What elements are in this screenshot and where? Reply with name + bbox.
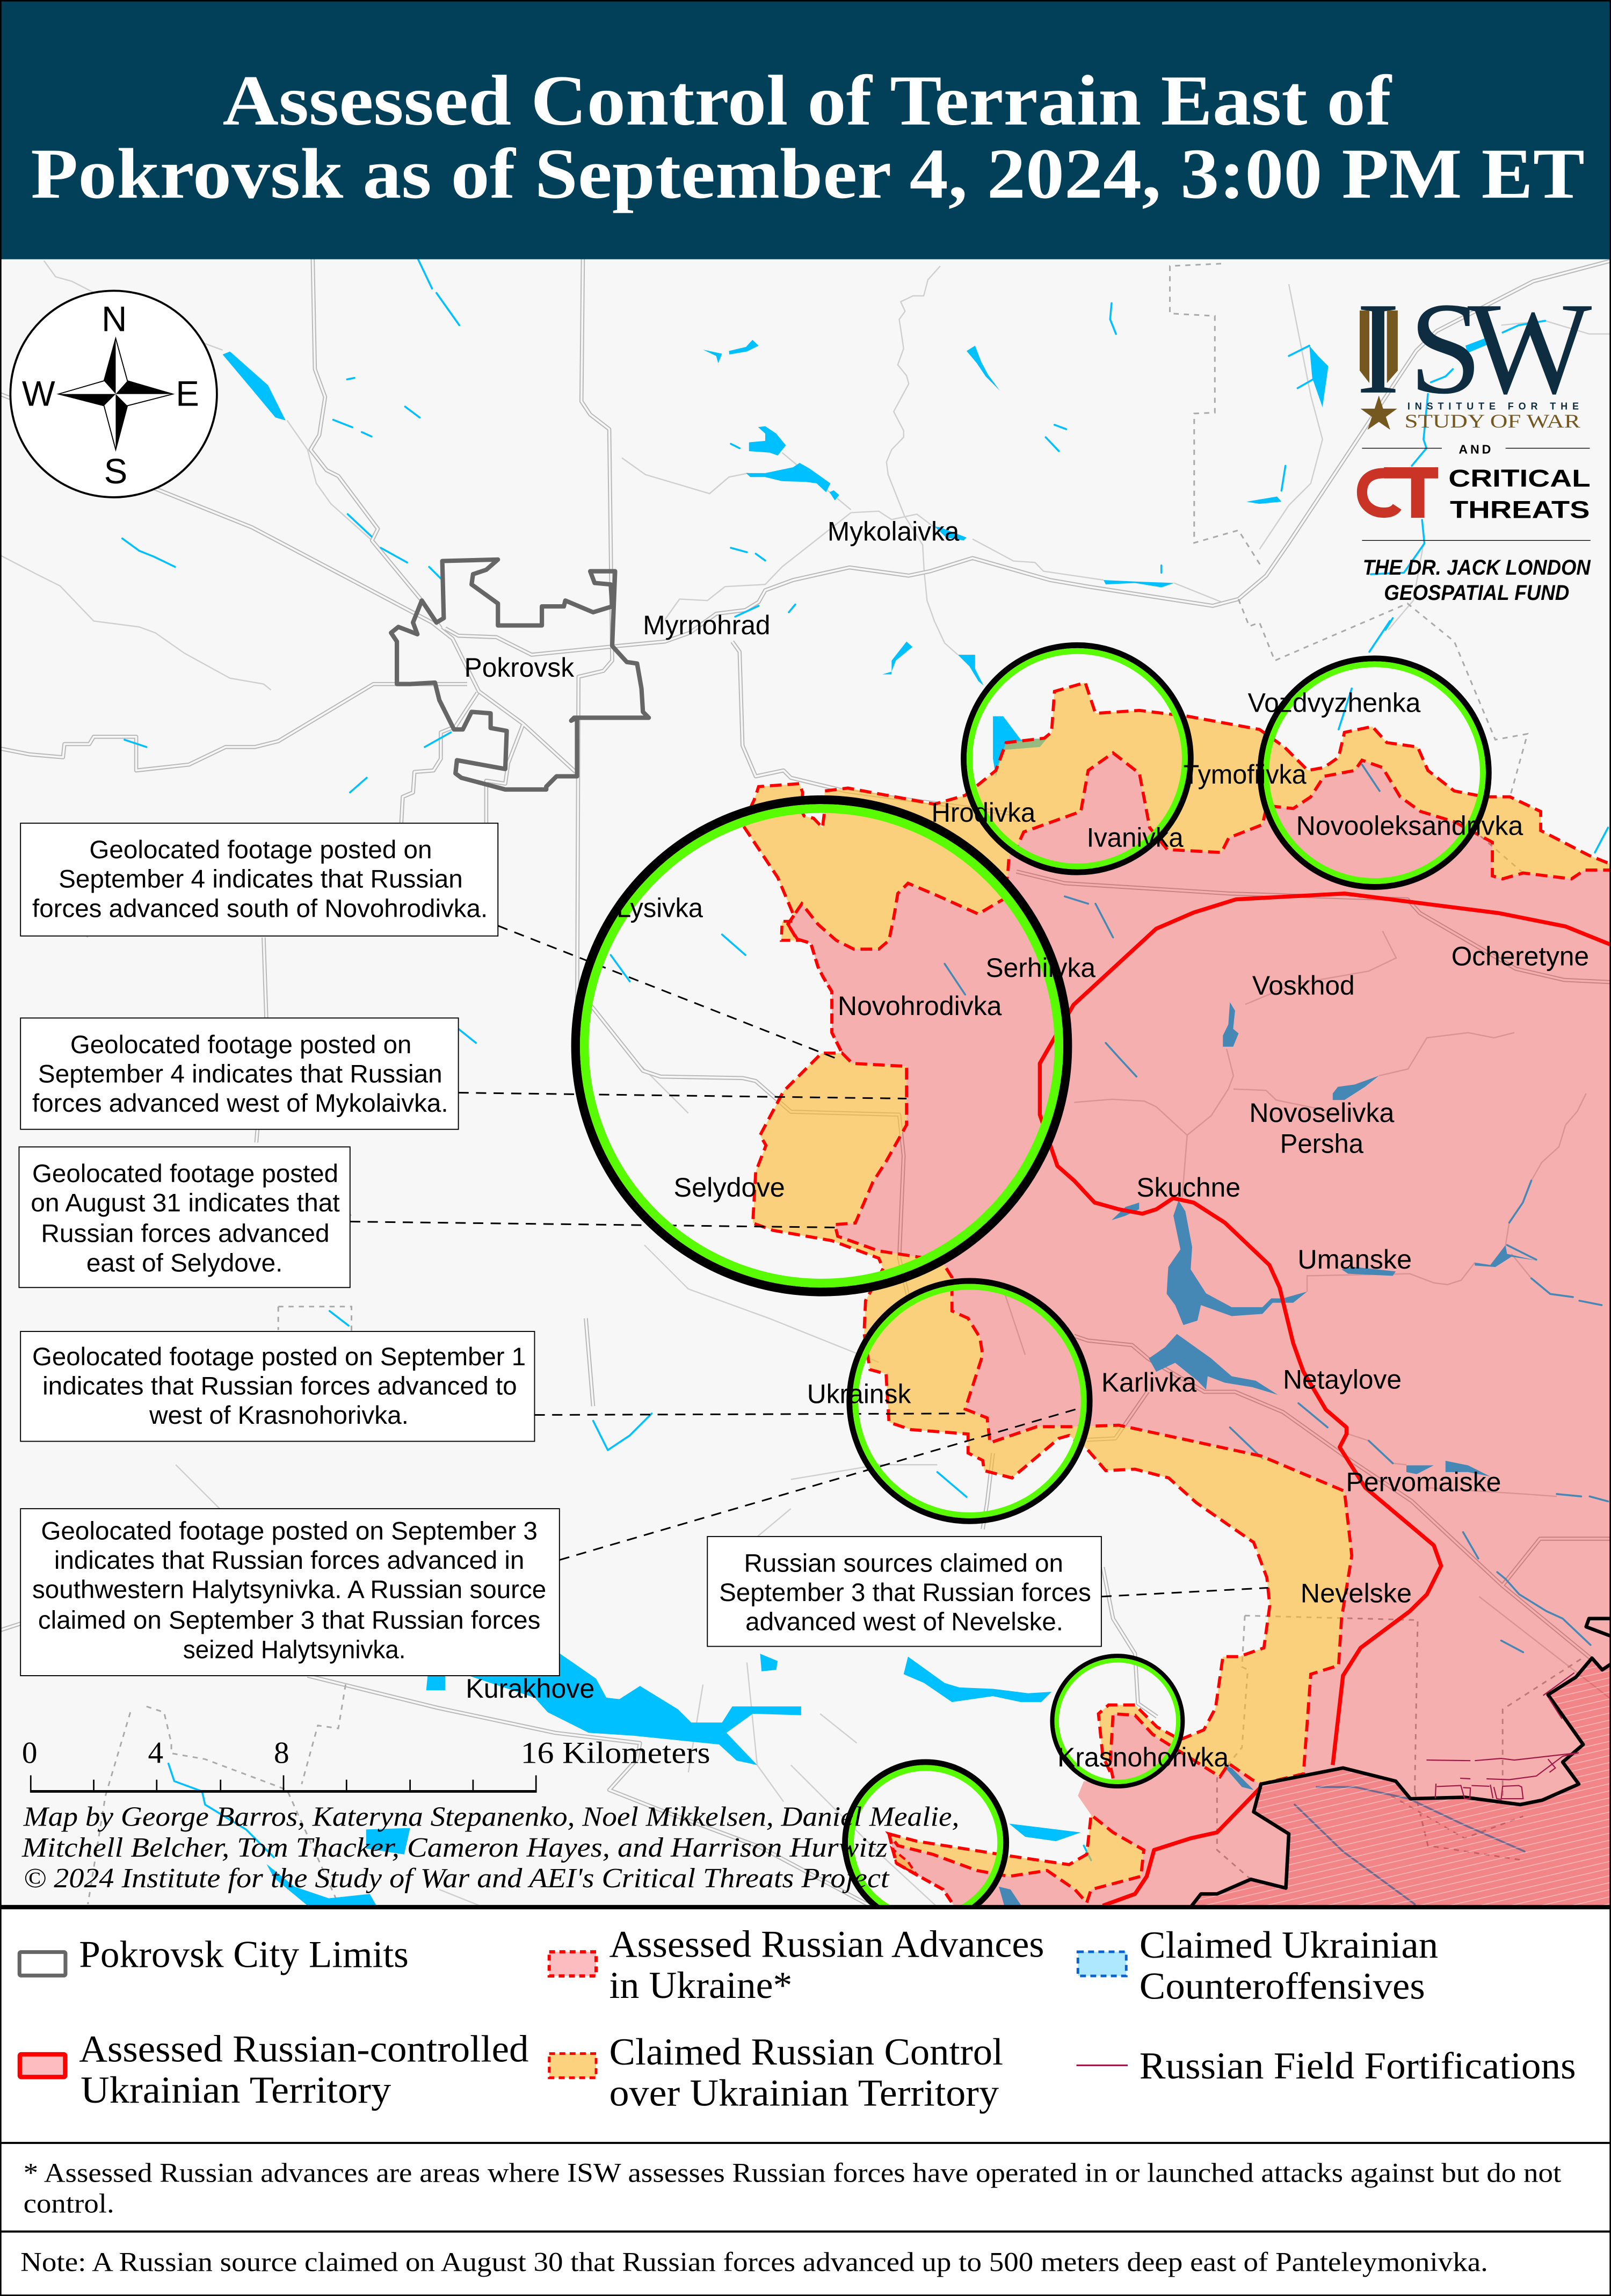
Jack London Geospatial Fund: GEOSPATIAL FUND — [1384, 581, 1569, 605]
map credits: Mitchell Belcher, Tom Thacker, Cameron Hayes, and Harrison Hurwitz — [21, 1833, 888, 1863]
title text: Assessed Control of Terrain East of — [223, 61, 1392, 140]
settlement labels: Hrodivka — [932, 798, 1036, 828]
roads — [0, 258, 1611, 1906]
callout: west of Mykolaivka: Geolocated footage posted on — [70, 1031, 411, 1059]
legend: claimed Ukrainian counteroffensives: Claimed Ukrainian — [1140, 1924, 1438, 1966]
claimed Russian control: small western piece — [781, 921, 798, 940]
map credits — [21, 1802, 959, 1894]
divider AND: AND — [1458, 442, 1491, 456]
Critical Threats logo: CRITICAL — [1448, 465, 1591, 492]
map base — [0, 259, 1611, 1909]
settlement labels: Ukrainsk — [807, 1379, 911, 1409]
scale bar: 4 — [148, 1736, 163, 1770]
claimed Russian control: southwest patch — [889, 1815, 1144, 1903]
settlement labels: Ocheretyne — [1452, 941, 1589, 971]
settlement labels: Kurakhove — [466, 1674, 594, 1704]
logos: ISW, Critical Threats, Jack London fund — [1356, 276, 1592, 605]
title banner — [0, 0, 1611, 259]
title text — [31, 61, 1585, 213]
callout: Halytsynivka — [20, 1509, 560, 1676]
highlight circle: Novohrodivka Selydove — [576, 800, 1068, 1292]
scale bar: 8 — [274, 1736, 289, 1770]
settlement labels: Lysivka — [616, 893, 703, 923]
callout: Halytsynivka: Geolocated footage posted on September 3 — [41, 1517, 538, 1545]
legend: claimed Russian control: Claimed Russian Control — [609, 2031, 1003, 2073]
ISW logo: INSTITUTE FOR THE — [1407, 401, 1579, 412]
legend: Pokrovsk city limits: Pokrovsk City Limits — [79, 1934, 409, 1976]
settlement labels: Krasnohorivka — [1057, 1742, 1229, 1772]
legend: assessed Russian advances: in Ukraine* — [609, 1965, 792, 2007]
legend: claimed Russian control — [549, 2031, 1003, 2114]
map credits: Map by George Barros, Kateryna Stepanenko, Noel Mikkelsen, Daniel Mealie, — [23, 1802, 959, 1833]
legend: assessed Russian-controlled territory: Ukrainian Territory — [81, 2069, 391, 2111]
Pokrovsk city limits — [391, 560, 649, 790]
ISW logo: I — [1356, 276, 1400, 422]
ISW logo: W — [1468, 276, 1592, 422]
callout: Halytsynivka: southwestern Halytsynivka. A Russian source — [32, 1575, 546, 1604]
legend: assessed Russian-controlled territory — [20, 2029, 529, 2111]
legend: assessed Russian advances: Assessed Russian Advances — [609, 1924, 1044, 1966]
highlight circle: Vozdvyzhenka — [1260, 658, 1489, 887]
highlight circle: Ukrainsk — [850, 1281, 1090, 1521]
callout: west of Mykolaivka — [20, 1018, 459, 1129]
legend: assessed Russian-controlled territory: Assessed Russian-controlled — [79, 2029, 529, 2070]
administrative boundaries dashed — [88, 264, 1585, 1907]
Russian field fortifications — [1426, 1673, 1579, 1799]
callout: south of Novohrodivka: September 4 indicates that Russian — [59, 865, 463, 894]
highlight circle: Ivanivka — [964, 645, 1191, 872]
callout: south of Novohrodivka: Geolocated footage posted on — [89, 836, 432, 864]
water bodies and rivers — [122, 258, 1608, 1907]
settlement labels: Voskhod — [1252, 970, 1355, 1001]
compass rose: N — [101, 299, 127, 338]
footnote panel: control. — [24, 2189, 114, 2219]
ISW logo — [1356, 276, 1592, 432]
highlight circle: southwest — [845, 1762, 1006, 1923]
settlement labels: Vozdvyzhenka — [1248, 687, 1421, 718]
ISW logo: S — [1409, 276, 1482, 422]
settlement labels: Mykolaivka — [828, 516, 960, 546]
callout: west of Nevelske: September 3 that Russian forces — [719, 1578, 1091, 1607]
scale bar — [22, 1736, 710, 1791]
settlement labels: Novooleksandrivka — [1296, 811, 1523, 841]
callout: east of Selydove — [19, 1147, 350, 1287]
compass rose — [10, 291, 217, 497]
map credits: © 2024 Institute for the Study of War and AEI's Critical Threats Project — [24, 1863, 890, 1894]
callout: Halytsynivka: indicates that Russian forces advanced in — [54, 1546, 524, 1575]
note panel — [0, 2232, 1611, 2296]
compass rose: W — [22, 374, 55, 413]
compass rose: S — [104, 452, 127, 491]
callout: west of Mykolaivka: September 4 indicates that Russian — [38, 1060, 442, 1088]
callout: west of Nevelske: Russian sources claimed on — [744, 1549, 1063, 1577]
settlement labels: Umanske — [1297, 1244, 1412, 1274]
callout: west of Mykolaivka: forces advanced west of Mykolaivka. — [32, 1089, 448, 1118]
callout: east of Selydove: east of Selydove. — [86, 1249, 282, 1277]
callout: south of Novohrodivka: forces advanced south of Novohrodivka. — [32, 894, 488, 923]
settlement labels — [465, 516, 1589, 1772]
legend: claimed Ukrainian counteroffensives — [1078, 1924, 1438, 2007]
callout: south of Novohrodivka — [20, 823, 498, 936]
Jack London Geospatial Fund: THE DR. JACK LONDON — [1363, 556, 1591, 580]
settlement labels: Netaylove — [1283, 1364, 1402, 1394]
ISW logo: STUDY OF WAR — [1404, 410, 1580, 432]
note panel: Note: A Russian source claimed on August 30 that Russian forces advanced up to 500 meters deep east of Panteleymonivka. — [20, 2247, 1488, 2277]
settlement labels: Selydove — [674, 1172, 785, 1203]
scale bar: 16 Kilometers — [521, 1736, 710, 1770]
highlight circle: Krasnohorivka — [1053, 1656, 1182, 1786]
settlement labels: Karlivka — [1101, 1367, 1197, 1397]
thin rivers and minor roads — [0, 260, 1611, 1907]
legend: Russian field fortifications: Russian Field Fortifications — [1140, 2045, 1576, 2087]
settlement labels: Skuchne — [1136, 1172, 1240, 1203]
settlement labels: Novoselivka — [1249, 1098, 1395, 1128]
callout: west of Krasnohorivka — [20, 1331, 534, 1442]
compass rose: E — [176, 374, 199, 413]
legend: assessed Russian advances — [549, 1924, 1044, 2007]
settlement labels: Tymofiivka — [1184, 759, 1307, 790]
scale bar: 0 — [22, 1736, 38, 1770]
settlement labels: Myrnohrad — [643, 610, 771, 640]
callout: west of Krasnohorivka: Geolocated footage posted on September 1 — [32, 1343, 526, 1371]
occupied before 2022 hatched area — [1191, 1658, 1611, 1907]
Russian forward line solid red — [1040, 894, 1611, 1906]
claimed Russian control: southern band — [753, 1053, 1352, 1784]
callout: Halytsynivka: claimed on September 3 that Russian forces — [38, 1606, 540, 1635]
settlement labels: Novohrodivka — [838, 991, 1002, 1021]
settlement labels: Persha — [1280, 1128, 1363, 1158]
callout: west of Nevelske — [707, 1537, 1101, 1646]
callout: east of Selydove: on August 31 indicates that — [31, 1189, 340, 1217]
assessed Russian-controlled Ukrainian territory — [788, 753, 1611, 1907]
claimed Russian control: northern band — [743, 683, 1611, 949]
footnote panel: * Assessed Russian advances are areas where ISW assesses Russian forces have operated in or launched attacks against but do not — [24, 2157, 1561, 2188]
claimed Russian control: tiny lower patch — [892, 1849, 917, 1875]
legend: claimed Ukrainian counteroffensives: Counteroffensives — [1140, 1965, 1425, 2007]
callout: west of Krasnohorivka: indicates that Russian forces advanced to — [42, 1372, 517, 1400]
title text: Pokrovsk as of September 4, 2024, 3:00 PM ET — [31, 134, 1585, 213]
assessed Russian advance edges — [788, 916, 955, 1907]
callout: east of Selydove: Russian forces advanced — [41, 1220, 330, 1248]
Critical Threats logo — [1362, 465, 1591, 524]
footnote panel — [0, 2143, 1611, 2232]
callout: west of Nevelske: advanced west of Nevelske. — [745, 1607, 1063, 1636]
Critical Threats logo: THREATS — [1450, 496, 1590, 524]
callout: Halytsynivka: seized Halytsynivka. — [183, 1635, 405, 1664]
settlement labels: Ivanivka — [1087, 822, 1184, 852]
settlement labels: Pokrovsk — [465, 653, 574, 683]
callout: west of Krasnohorivka: west of Krasnohorivka. — [149, 1401, 409, 1430]
callout: east of Selydove: Geolocated footage posted — [32, 1160, 338, 1188]
settlement labels: Serhiivka — [985, 953, 1095, 983]
dashed callout leader lines — [350, 926, 1268, 1597]
settlement labels: Pervomaiske — [1346, 1467, 1501, 1497]
Jack London Geospatial Fund — [1363, 556, 1591, 605]
legend panel — [0, 1907, 1611, 2143]
settlement labels: Nevelske — [1301, 1578, 1412, 1609]
legend: claimed Russian control: over Ukrainian Territory — [609, 2072, 999, 2114]
pre-2022 line of control black — [1191, 1619, 1611, 1907]
map panel — [0, 258, 1611, 1923]
